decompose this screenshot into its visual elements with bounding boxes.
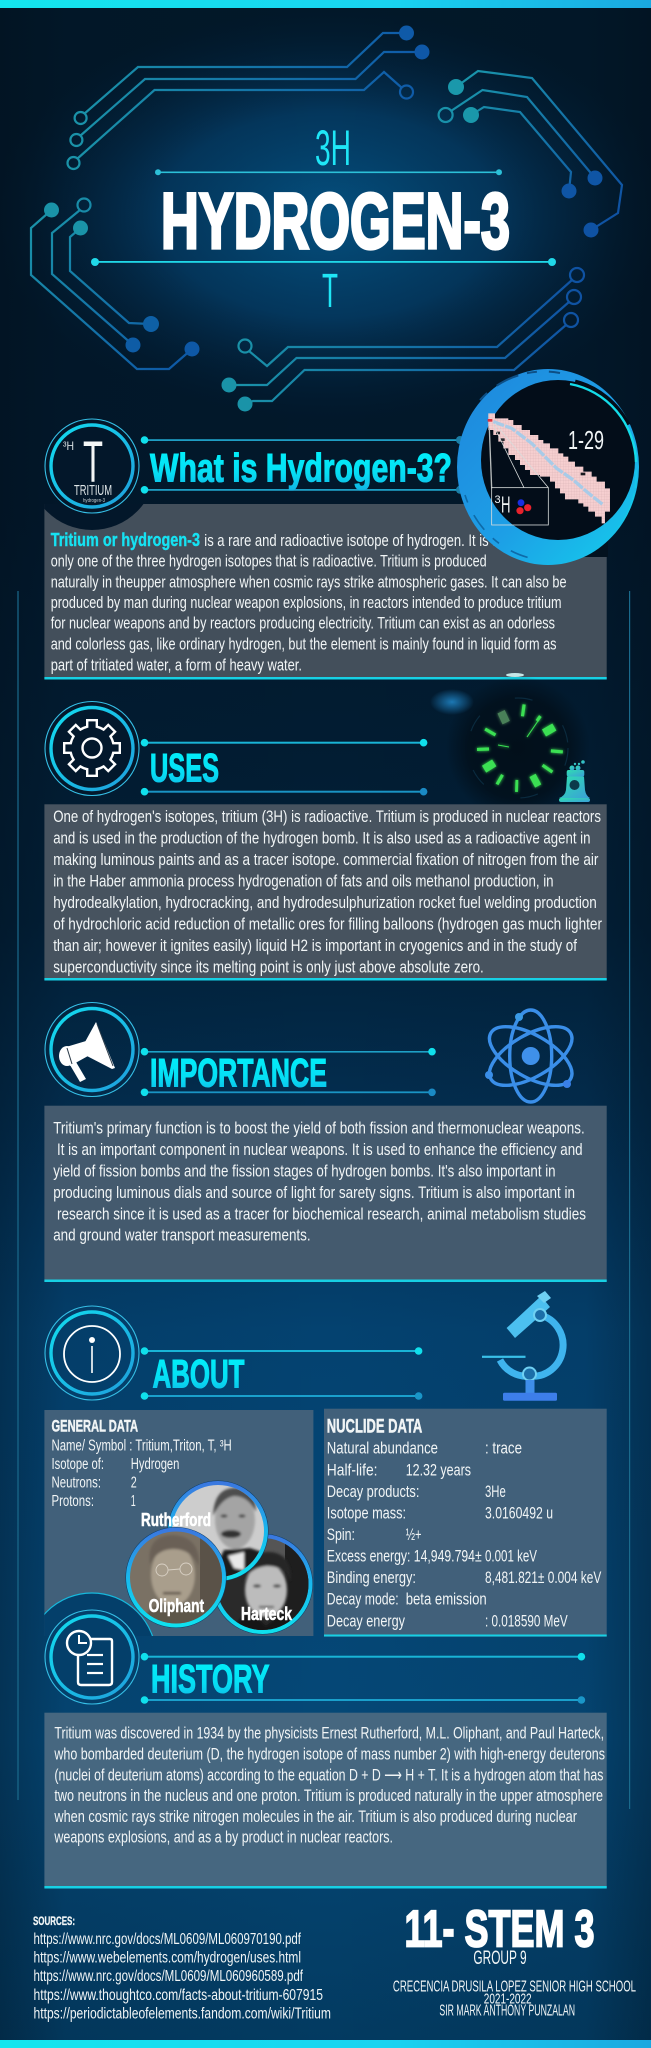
heading rules	[141, 1347, 422, 1400]
nuclide data rows	[327, 1439, 602, 1630]
general data rows: Hydrogen	[131, 1456, 179, 1473]
isotope chart ring	[457, 369, 639, 565]
nuclide data rows: Isotope mass:	[327, 1503, 406, 1522]
source links: https://www.webelements.com/hydrogen/uses.html	[34, 1950, 301, 1967]
nuclide data rows: 12.32 years	[406, 1460, 471, 1479]
chart: nuclide band	[488, 413, 610, 525]
heading: HISTORY	[151, 1658, 270, 1702]
heading: ABOUT	[152, 1352, 244, 1396]
badge: tritium symbol: hydrogen-3	[83, 498, 105, 504]
general data rows: Name/ Symbol : Tritium,Triton, T, ³H	[52, 1438, 232, 1455]
circuit: left group	[31, 198, 200, 369]
nuclide data rows: 3.0160492 u	[485, 1503, 553, 1522]
title block	[91, 120, 556, 318]
nuclide data rows: 3He	[485, 1482, 506, 1501]
bottom bar	[0, 2040, 651, 2048]
heading rules	[141, 436, 464, 494]
body text	[53, 807, 602, 977]
circuit: top group	[68, 26, 430, 169]
credits	[393, 1900, 636, 2020]
circuit: bottom group	[222, 268, 584, 412]
source links: https://www.nrc.gov/docs/ML0609/ML060970190.pdf	[34, 1931, 302, 1948]
body text: superconductivity since its melting point is only just above absolute zero.	[53, 958, 484, 977]
body text	[51, 530, 566, 674]
chart: zoom lines	[489, 423, 548, 525]
sources heading: SOURCES:	[33, 1914, 75, 1928]
watch glow	[430, 676, 590, 820]
nuclide data rows: Spin:	[327, 1525, 355, 1544]
title rule bottom	[91, 258, 556, 266]
general data rows: 1	[131, 1493, 136, 1510]
circuit: right group	[439, 71, 622, 238]
general data rows: Isotope of:	[52, 1456, 104, 1473]
nuclide data rows: Excess energy: 14,949.794±	[327, 1547, 482, 1566]
badge: tritium symbol: T	[83, 430, 103, 495]
chart label: 3H: 3	[494, 494, 501, 506]
nuclide data rows: Binding energy:	[327, 1568, 416, 1587]
heading: USES	[150, 746, 219, 790]
title rule top	[155, 169, 502, 175]
body text: only one of the three hydrogen isotopes that is radioactive. Tritium is produced	[51, 552, 487, 571]
panel: importance	[44, 1002, 607, 1282]
watch dial	[477, 704, 563, 792]
badge: tritium symbol: TRITIUM	[74, 483, 112, 499]
tritium nucleus	[516, 499, 531, 514]
year: 2021-2022	[484, 1990, 532, 2007]
general data rows: 2	[131, 1474, 137, 1491]
panel underline	[44, 677, 607, 680]
body text	[53, 1118, 586, 1245]
heading rules	[141, 739, 427, 796]
nuclide data rows: 0.001 keV	[485, 1547, 537, 1566]
heading: nuclide data: NUCLIDE DATA	[327, 1417, 422, 1438]
portrait: Oliphant	[125, 1527, 230, 1630]
body text: weapons explosions, and as a by product in nuclear reactors.	[54, 1828, 393, 1847]
nuclide data rows: ½+	[406, 1525, 422, 1544]
brushed blue ring	[457, 369, 639, 565]
heading: general data: GENERAL DATA	[52, 1417, 138, 1436]
badge: tritium symbol: ³H	[63, 439, 74, 453]
general data rows: Protons:	[52, 1493, 94, 1510]
panel background	[44, 1713, 607, 1888]
side rules	[18, 591, 630, 1809]
panel background	[44, 504, 607, 679]
chart label: H: H	[501, 491, 510, 517]
body text: is a rare and radioactive isotope of hydrogen. It is the	[204, 531, 510, 550]
icon: reactor tower	[559, 760, 590, 802]
panel underline	[44, 1280, 607, 1282]
body text: part of tritiated water, a form of heavy water.	[51, 655, 302, 674]
underline	[324, 1634, 607, 1636]
label: Harteck: Harteck	[241, 1604, 293, 1624]
label: Rutherford: Rutherford	[141, 1510, 211, 1530]
panel background	[44, 804, 607, 980]
nuclide data rows: : trace	[485, 1439, 522, 1458]
panel underline	[44, 1886, 607, 1888]
icon: atom	[480, 1010, 581, 1102]
body text	[54, 1724, 605, 1847]
icon: microscope	[482, 1291, 563, 1401]
top bar	[0, 0, 651, 8]
panel: general data	[44, 1410, 313, 1636]
portrait: Harteck	[210, 1534, 315, 1635]
circuit traces	[31, 26, 622, 412]
chart label: 1-29: 1-29	[568, 425, 604, 455]
heading rules	[141, 1048, 436, 1096]
sources	[33, 1914, 331, 2022]
nuclide data rows: Half-life:	[327, 1460, 378, 1479]
source links	[34, 1931, 331, 2022]
chart corner cutout	[520, 503, 608, 557]
panel: what is hydrogen-3	[28, 369, 639, 680]
panel: nuclide data	[324, 1409, 607, 1637]
heading rules	[141, 1653, 585, 1704]
badge: gear	[45, 702, 139, 796]
group: GROUP 9	[473, 1947, 527, 1969]
nuclide data rows: Decay products:	[327, 1482, 419, 1501]
body text: and ground water transport measurements.	[53, 1226, 311, 1245]
portrait: Rutherford	[168, 1480, 268, 1581]
general data rows: Neutrons:	[52, 1474, 101, 1491]
badge: tritium symbol	[45, 419, 139, 513]
nuclide data rows: Decay mode:	[327, 1590, 399, 1609]
panel underline	[44, 978, 607, 980]
heading: What is Hydrogen-3?	[150, 446, 452, 490]
nuclide data rows: : 0.018590 MeV	[485, 1611, 568, 1630]
subtitle: 3H: 3H	[315, 120, 351, 176]
source links: https://www.nrc.gov/docs/ML0609/ML060960589.pdf	[34, 1968, 304, 1985]
badge: info	[45, 1306, 139, 1400]
general data rows	[52, 1438, 232, 1510]
subtitle: T: T	[322, 265, 338, 318]
panel background	[44, 1106, 607, 1282]
source links: https://periodictableofelements.fandom.com/wiki/Tritium	[34, 2005, 331, 2022]
badge cutout	[44, 504, 144, 530]
nuclide data rows: Decay energy	[327, 1611, 405, 1630]
light streak	[506, 673, 524, 677]
panel: uses	[44, 676, 607, 980]
heading: IMPORTANCE	[150, 1052, 327, 1096]
label: Oliphant: Oliphant	[149, 1596, 204, 1616]
panel: about	[44, 1291, 607, 1637]
source links: https://www.thoughtco.com/facts-about-tritium-607915	[34, 1987, 323, 2004]
scientist portraits	[125, 1480, 315, 1635]
nuclide data rows: 8,481.821± 0.004 keV	[485, 1568, 602, 1587]
badge: megaphone	[45, 1002, 139, 1096]
nuclide data rows: Natural abundance	[327, 1439, 438, 1458]
badge: clock and document	[45, 1610, 139, 1704]
badge cutout	[44, 1592, 153, 1636]
panel: history	[28, 1480, 607, 1888]
nuclide data rows: beta emission	[406, 1590, 487, 1609]
body text: Tritium or hydrogen-3	[51, 530, 200, 550]
